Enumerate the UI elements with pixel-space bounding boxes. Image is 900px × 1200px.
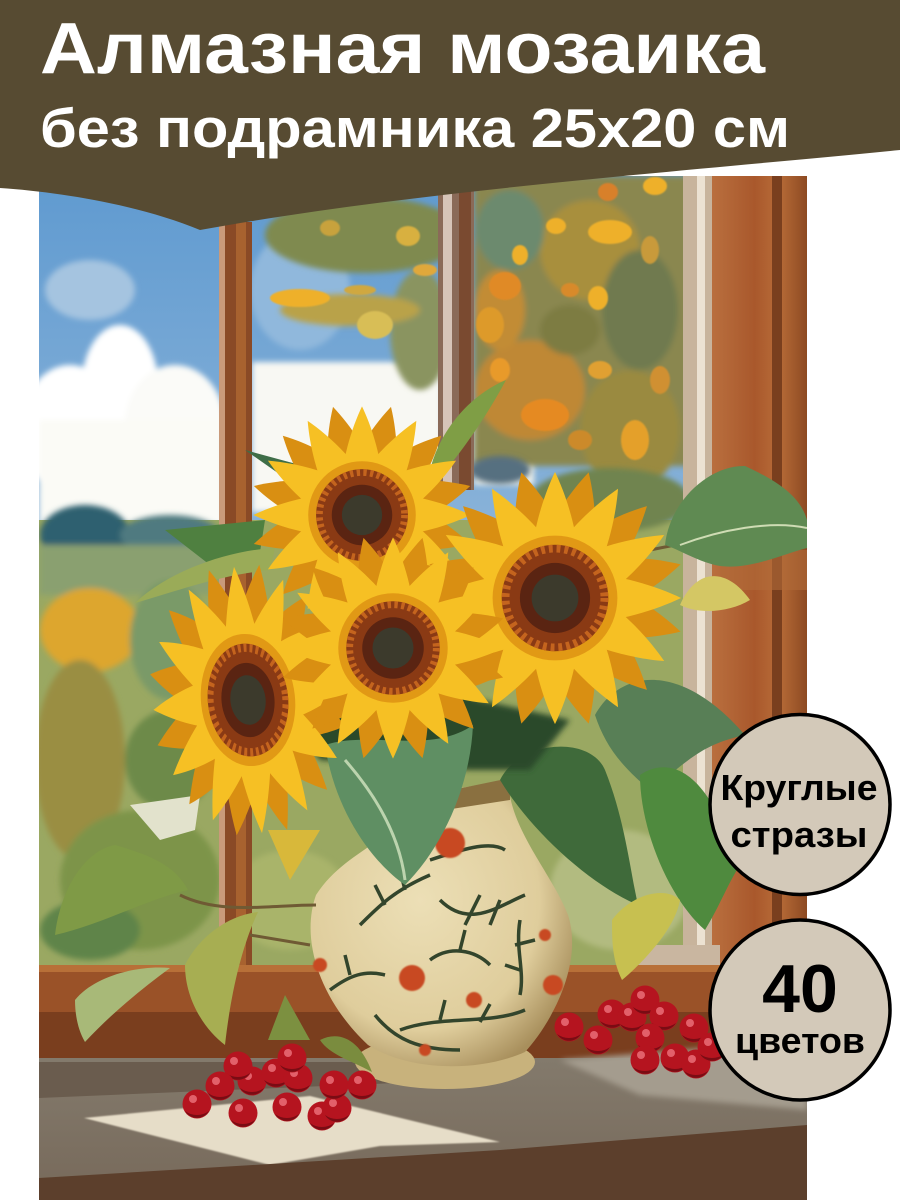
berries right	[554, 986, 726, 1078]
badge: 40 colours: цветов	[735, 1020, 865, 1061]
vase floral pattern	[313, 828, 563, 1056]
green leaves	[55, 380, 807, 1072]
right window frame	[683, 176, 807, 1036]
autumn leaves detail	[270, 177, 670, 460]
subtitle: без подрамника 25х20 см	[40, 97, 790, 159]
vase	[311, 778, 572, 1089]
sunflowers	[133, 400, 688, 851]
berries left	[182, 1044, 376, 1130]
autumn tree	[265, 176, 689, 490]
window mullions	[219, 190, 474, 972]
painting: sunflowers in vase by window	[20, 176, 809, 1200]
sunflower top	[254, 406, 470, 609]
badge: round rhinestones: Круглые	[720, 767, 878, 808]
header banner	[0, 0, 900, 230]
window sill	[39, 945, 720, 1058]
badge: 40 colours	[710, 920, 890, 1100]
sunflower right	[430, 472, 681, 724]
badge: round rhinestones: стразы	[730, 814, 868, 855]
sunflower left	[150, 565, 341, 835]
badge: 40 colours: 40	[762, 951, 838, 1027]
sky	[39, 176, 683, 520]
landscape	[35, 456, 699, 970]
table	[39, 1040, 807, 1200]
branch stems	[180, 540, 700, 945]
badge: round rhinestones	[710, 714, 890, 894]
sunflower center	[283, 538, 503, 758]
title: Алмазная мозаика	[40, 9, 766, 89]
